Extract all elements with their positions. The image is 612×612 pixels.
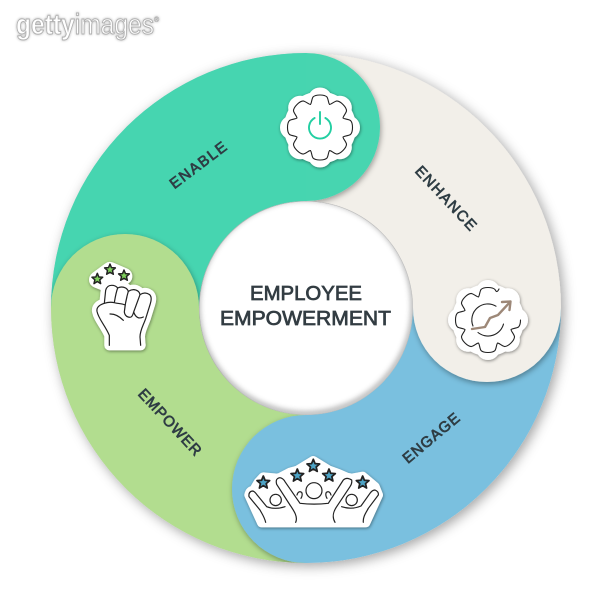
segment: enable body [51,53,306,308]
watermark: gettyimages: gettyimages [16,9,154,41]
center circle [198,198,414,414]
segment: engage body [306,308,561,563]
segment head: enhance [413,308,561,382]
label: enhance: ENHANCE [411,163,480,234]
label: engage: ENGAGE [400,410,463,467]
segment head: engage [232,415,306,563]
icon: gear with rising arrow [448,280,528,360]
icon: three cheering people with stars [249,459,378,523]
title [220,282,391,330]
title: EMPOWERMENT [220,307,391,330]
segment head: enable [306,53,380,201]
label: empower: EMPOWER [134,386,205,459]
icon: gear with power symbol [280,88,360,168]
label: enable: ENABLE [167,139,230,193]
segment head: empower [51,234,199,308]
segment: enhance body [306,53,561,308]
ring shadow base [51,53,561,563]
watermark: gettyimages: ® [154,16,160,24]
segment: empower body [51,308,306,563]
icon: raised fist with stars [92,264,151,345]
title: EMPLOYEE [250,282,362,305]
